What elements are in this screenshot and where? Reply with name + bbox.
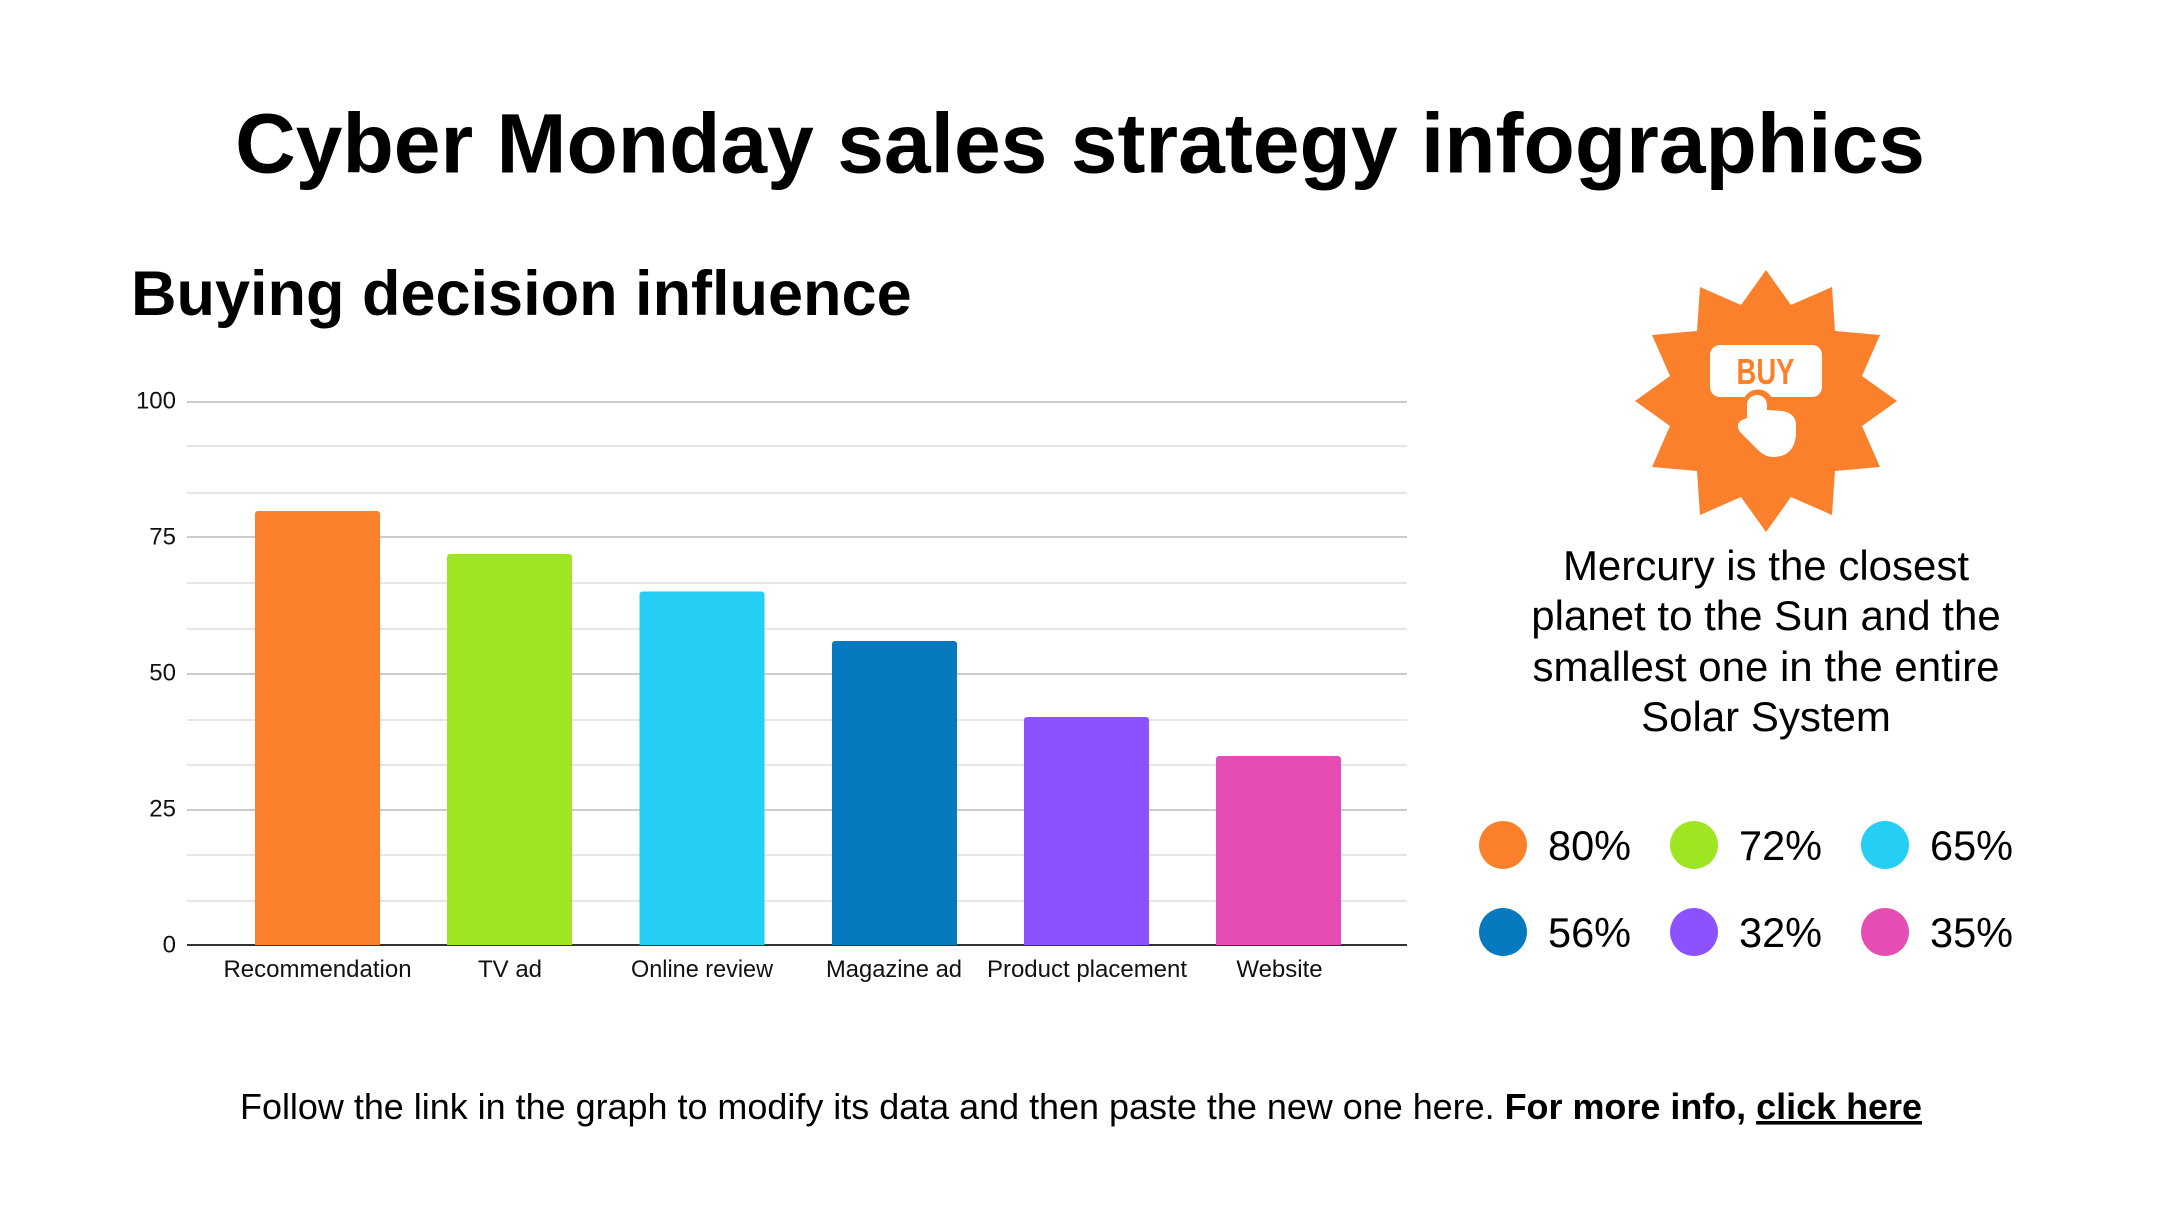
- y axis labels: 0: [163, 932, 176, 958]
- legend item: 35%: 35%: [1930, 909, 2013, 956]
- x axis labels: [223, 956, 1323, 983]
- legend: [1479, 821, 2013, 956]
- legend item: 65%: [1861, 821, 2013, 869]
- y axis labels: [136, 388, 176, 958]
- description text: Mercury is the closest: [1563, 542, 1969, 589]
- icon: buy badge: BUY: [1736, 351, 1794, 392]
- y axis labels: 25: [149, 796, 176, 822]
- legend item: 65%: 65%: [1930, 822, 2013, 869]
- description text: [1531, 542, 2001, 740]
- bar: Website: [1216, 756, 1341, 945]
- x axis labels: Product placement: [987, 956, 1187, 983]
- bar: Product placement: [1024, 717, 1149, 945]
- x axis labels: Recommendation: [223, 956, 412, 983]
- y axis labels: 100: [136, 388, 176, 414]
- x axis labels: Website: [1236, 956, 1323, 983]
- legend item: 80%: [1479, 821, 1631, 869]
- x axis labels: Online review: [631, 956, 774, 983]
- description text: Solar System: [1641, 693, 1891, 740]
- bar: TV ad: [447, 554, 572, 945]
- bar: Recommendation: [255, 511, 380, 945]
- description text: planet to the Sun and the: [1531, 592, 2001, 639]
- legend item: 56%: 56%: [1548, 909, 1631, 956]
- description text: smallest one in the entire: [1533, 643, 1999, 690]
- legend item: 35%: [1861, 908, 2013, 956]
- legend item: 72%: 72%: [1739, 822, 1822, 869]
- icon: buy badge: [1635, 270, 1897, 532]
- y axis labels: 75: [149, 524, 176, 550]
- title: Cyber Monday sales strategy infographics: [235, 96, 1925, 190]
- legend item: 32%: [1670, 908, 1822, 956]
- legend item: 32%: 32%: [1739, 909, 1822, 956]
- legend item: 80%: 80%: [1548, 822, 1631, 869]
- bar chart: [136, 388, 1407, 983]
- legend item: 72%: [1670, 821, 1822, 869]
- legend item: 56%: [1479, 908, 1631, 956]
- y axis labels: 50: [149, 660, 176, 686]
- bar: Magazine ad: [832, 641, 957, 945]
- bar: Online review: [640, 592, 764, 945]
- x axis labels: Magazine ad: [826, 956, 962, 983]
- x axis labels: TV ad: [478, 956, 542, 983]
- chart heading: Buying decision influence: [131, 259, 912, 329]
- footer note: Follow the link in the graph to modify its data and then paste the new one here. For more info, click here: [240, 1086, 1922, 1127]
